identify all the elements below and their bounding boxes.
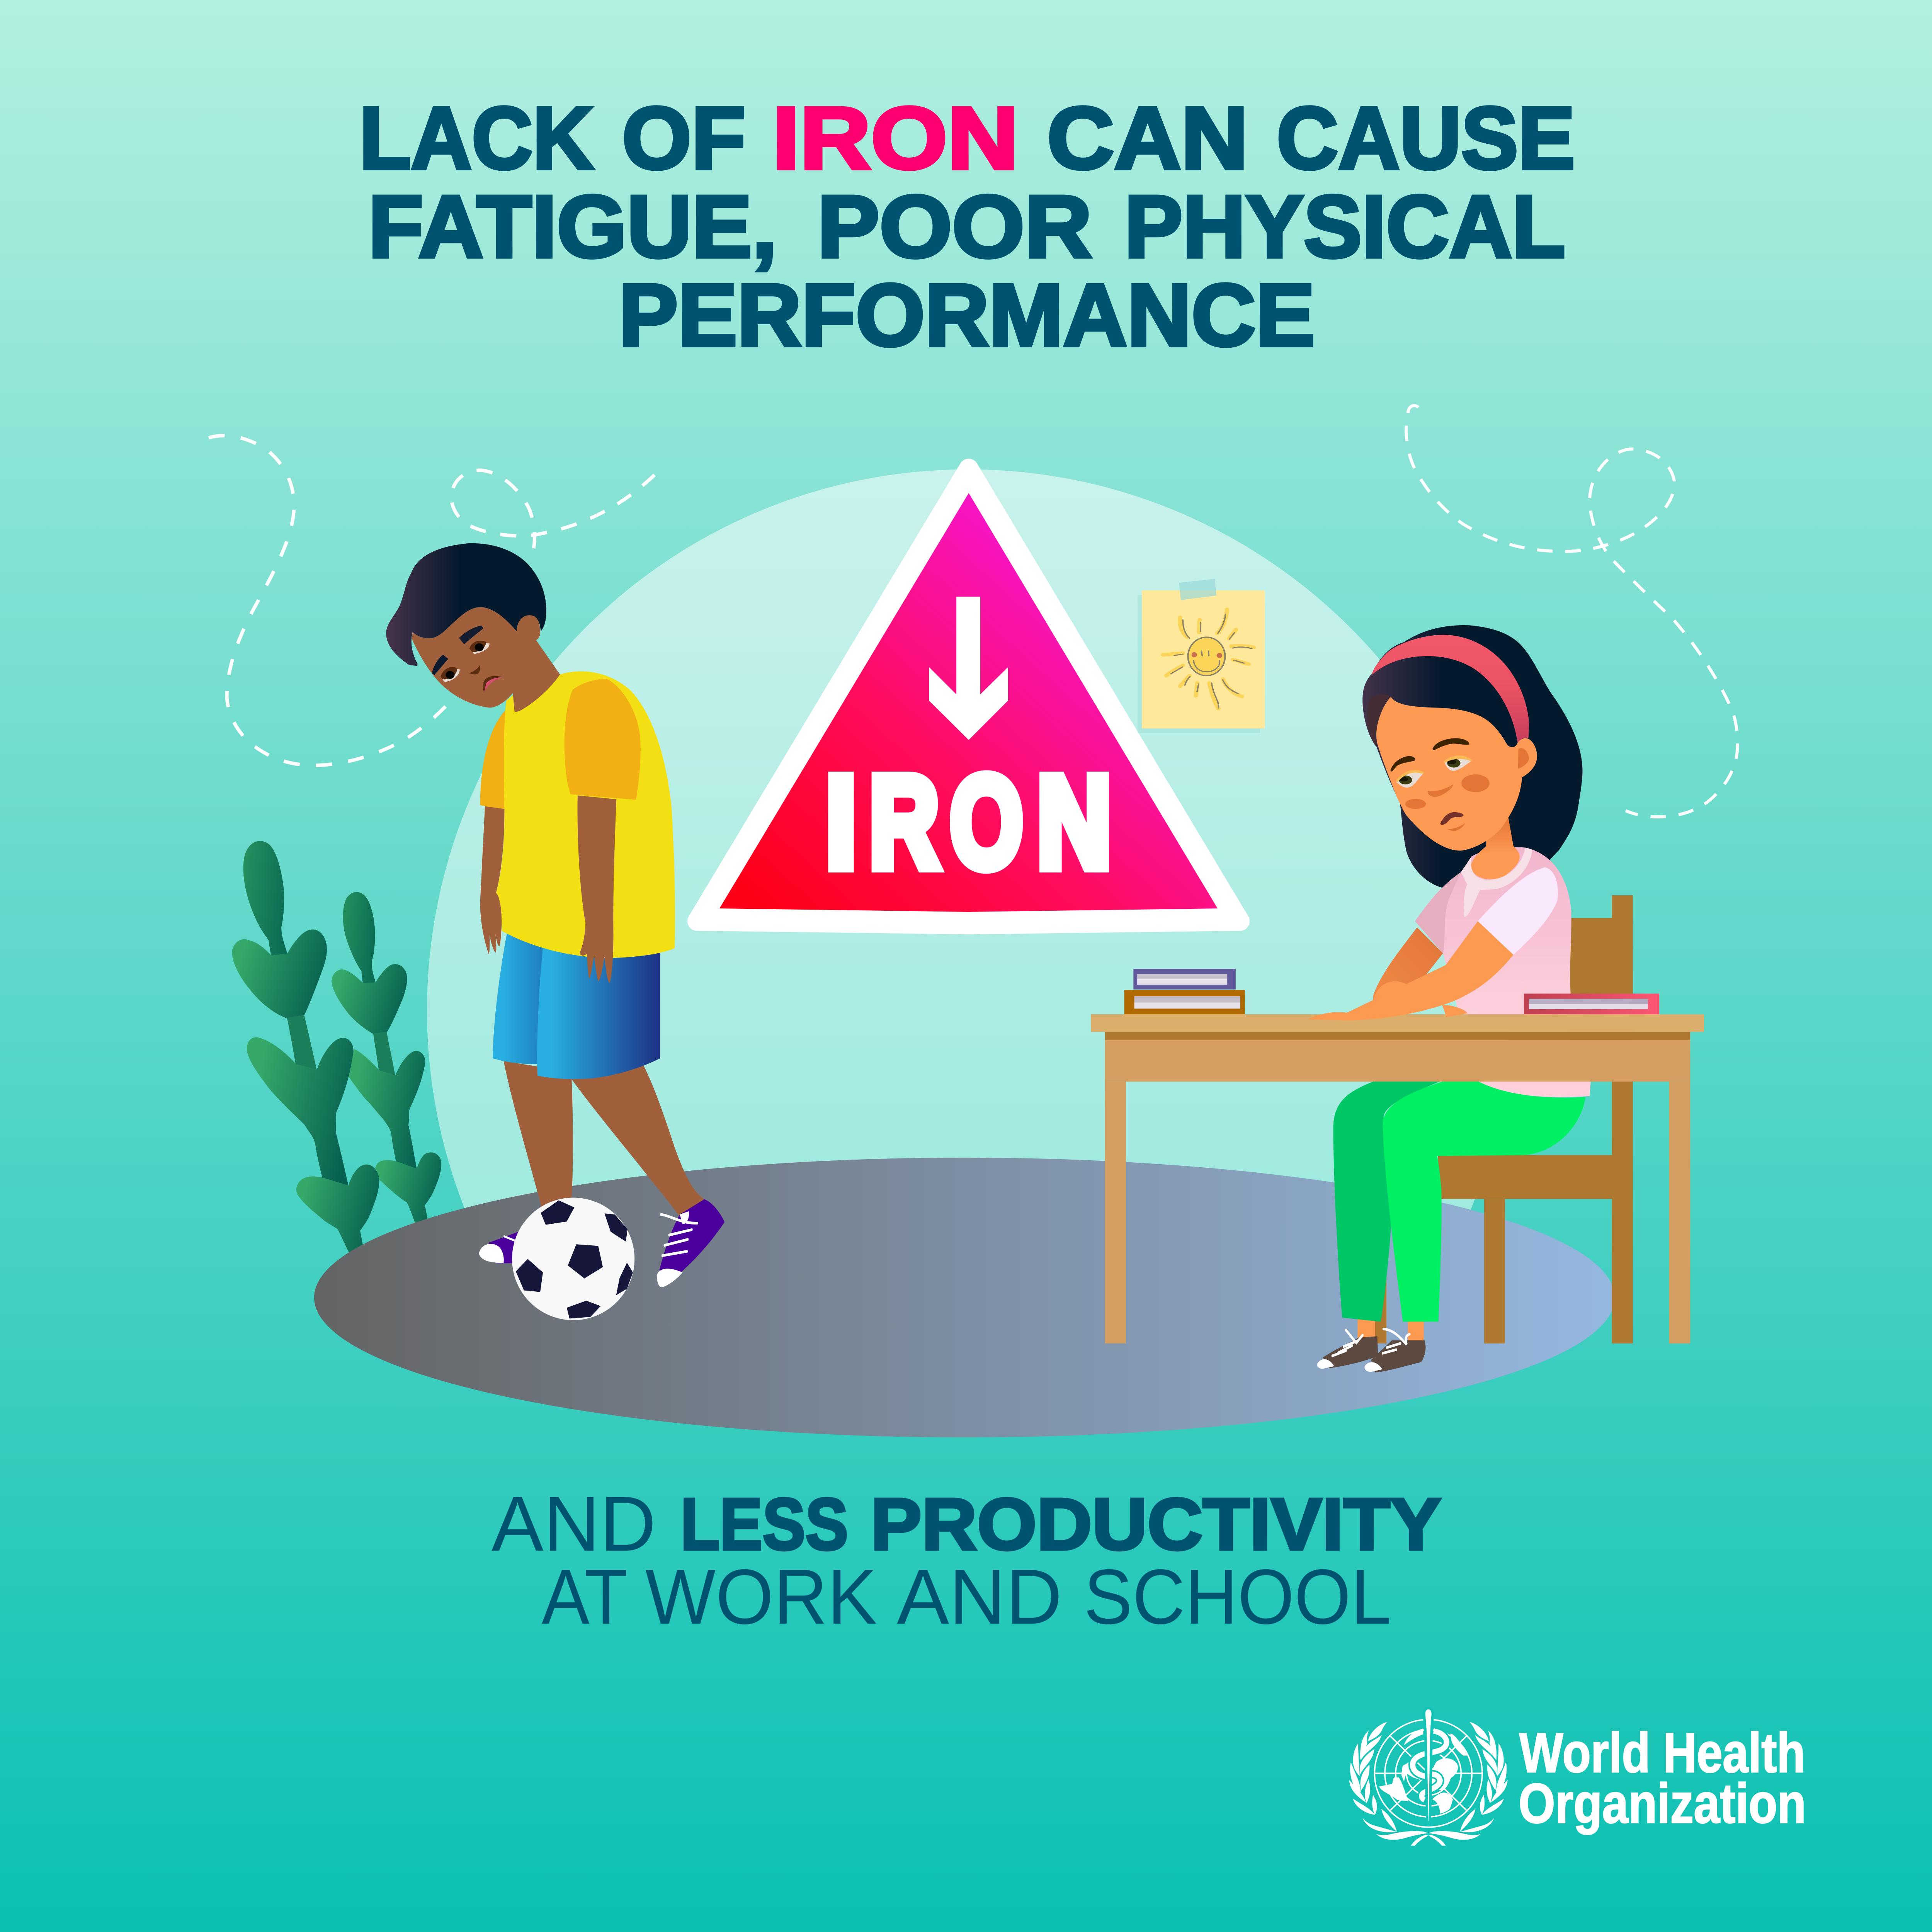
far arm [480, 806, 504, 954]
ribbon [1376, 1831, 1481, 1846]
sun sketch lines [1171, 614, 1252, 708]
inner ear [1518, 748, 1529, 769]
serpent [1413, 1731, 1447, 1800]
continents [1379, 1734, 1468, 1813]
tape [1179, 579, 1216, 600]
bottom text [492, 1480, 1441, 1640]
bottom text: AT [542, 1553, 628, 1640]
ground ellipse [314, 1158, 1615, 1437]
neck [1471, 818, 1520, 879]
background bubble [427, 469, 1509, 1314]
iron label: I [826, 750, 856, 895]
warning triangle: iron [697, 468, 1240, 925]
bottom text: SCHOOL [1084, 1553, 1391, 1640]
girl back hair [1362, 625, 1582, 888]
face and neck [412, 607, 560, 712]
title: OF [622, 89, 746, 187]
dashed flight path: right [1406, 406, 1738, 817]
hair shade [1367, 694, 1391, 747]
laurel right [1460, 1722, 1508, 1832]
shorts back [493, 932, 543, 1064]
iron label: R [869, 750, 939, 895]
eyebrows [432, 626, 483, 675]
eye left [1396, 770, 1424, 788]
triangle border [697, 468, 1240, 925]
boy head [386, 543, 560, 712]
bottom text: WORK [645, 1553, 877, 1640]
far sleeve [480, 703, 513, 810]
kicking leg [571, 1064, 704, 1217]
shirt shade [1415, 872, 1461, 953]
note shadow [1138, 595, 1260, 733]
plants [232, 841, 441, 1255]
title: IRON [772, 89, 1019, 187]
ankles [1357, 1317, 1424, 1343]
collar [1461, 848, 1532, 917]
iron label [826, 750, 1111, 895]
title: CAN [1047, 89, 1248, 187]
eye right [1443, 755, 1473, 771]
blush right [1461, 774, 1490, 792]
title: FATIGUE, [368, 178, 777, 276]
ear [517, 615, 540, 640]
title [359, 89, 1575, 364]
face [1376, 697, 1526, 851]
bottom text: LESS [680, 1483, 848, 1565]
girl head [1367, 635, 1537, 851]
shirt [496, 671, 675, 958]
sun eyes [1192, 652, 1197, 657]
sticky note with sun drawing [1138, 579, 1265, 733]
WHO wordmark: Organization [1519, 1772, 1806, 1835]
mouth [1440, 812, 1463, 825]
shorts front [537, 947, 660, 1079]
book right [1524, 993, 1659, 1014]
boy body [479, 671, 724, 1320]
shirt [1415, 847, 1572, 1014]
sun eye right [1217, 653, 1222, 658]
blush left [1405, 799, 1426, 809]
icon: down arrow [929, 597, 1008, 740]
hair [386, 543, 546, 666]
chin [1447, 823, 1465, 831]
title: LACK [359, 89, 594, 187]
dashed flight path: upper left loop [451, 470, 655, 559]
desk [1091, 1014, 1704, 1344]
WHO wordmark [1519, 1721, 1806, 1835]
near arm [578, 796, 616, 983]
bottom text: AND [897, 1553, 1062, 1640]
headband [1372, 635, 1529, 743]
standing leg [503, 1061, 573, 1208]
mouth [483, 676, 504, 693]
shoes [1317, 1329, 1425, 1372]
dashed flight path: left [209, 435, 454, 765]
iron label: O [950, 750, 1023, 895]
title: CAUSE [1277, 89, 1575, 187]
WHO emblem [1349, 1708, 1508, 1846]
plant: left [232, 841, 379, 1255]
bottom text: AND [492, 1480, 656, 1567]
sleeve [1478, 867, 1558, 955]
bottom text: PRODUCTIVITY [871, 1483, 1441, 1565]
iron label: N [1037, 750, 1111, 895]
near arm and hand [1308, 921, 1514, 1020]
girl and desk [1091, 818, 1704, 1372]
sun rays [1163, 609, 1254, 709]
far hand [1374, 981, 1406, 1002]
books left [1124, 969, 1245, 1014]
globe grid [1374, 1719, 1482, 1827]
pants back leg [1333, 1079, 1446, 1322]
staff [1424, 1708, 1433, 1823]
eyebrows [1390, 738, 1469, 772]
near sleeve [565, 679, 641, 800]
near shoe [657, 1199, 724, 1287]
nose [1428, 784, 1453, 797]
ear [1518, 738, 1537, 777]
pants front leg [1383, 1079, 1585, 1322]
near fingers [1442, 1005, 1467, 1017]
soccer ball [512, 1198, 634, 1320]
laurel left [1349, 1722, 1397, 1832]
far arm [1373, 927, 1443, 1002]
note paper [1142, 590, 1265, 728]
shirt lower [1471, 1079, 1591, 1097]
WHO wordmark: World Health [1519, 1721, 1805, 1784]
serpent head [1404, 1728, 1423, 1745]
title: PERFORMANCE [619, 266, 1315, 364]
triangle fill [719, 493, 1218, 912]
plant: right [332, 892, 441, 1225]
eyes [440, 641, 490, 682]
title: POOR [817, 178, 1092, 276]
nose [469, 665, 480, 674]
far shoe [479, 1231, 521, 1263]
title: PHYSICAL [1124, 178, 1565, 276]
chair [1375, 895, 1633, 1344]
